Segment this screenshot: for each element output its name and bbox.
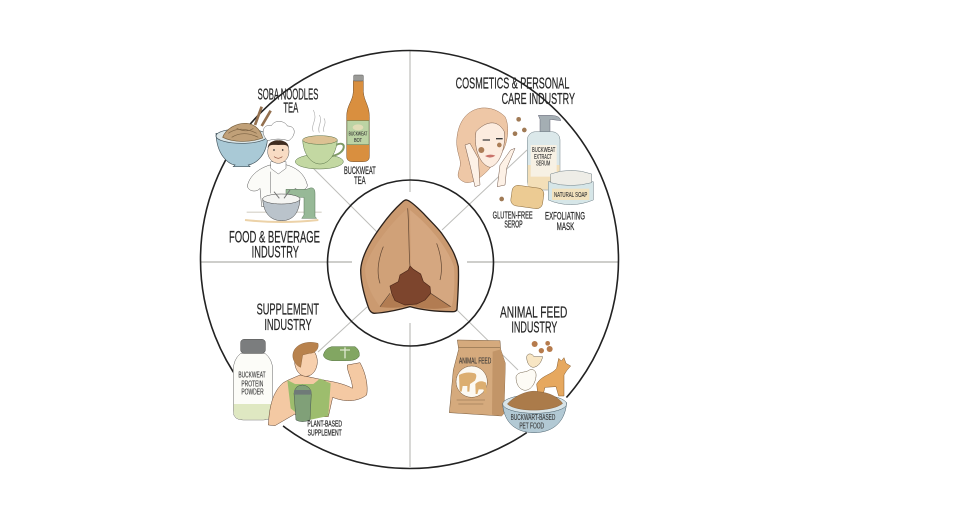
icon: serum bottle: BUCKWEAT xyxy=(532,147,556,154)
label: exfoliating mask: EXFOLIATING xyxy=(545,210,585,222)
icon: serum bottle: SERUM xyxy=(536,161,550,168)
bottle label: BOT xyxy=(354,138,362,144)
panel: food and beverage industry xyxy=(216,75,376,262)
icon: soba noodle bowl xyxy=(216,107,271,167)
icon: natural soap jar xyxy=(548,170,593,205)
icon: animal feed sack: ANIMAL FEED xyxy=(459,356,491,365)
label: exfoliating mask xyxy=(545,210,585,233)
icon: pet food bowl xyxy=(503,391,567,433)
heading: supplement industry: INDUSTRY xyxy=(264,317,312,334)
icon: mixing bowl and mixer xyxy=(245,188,322,222)
icon: chicken xyxy=(516,354,543,390)
icon: pet food bowl: BUCKWART-BASED xyxy=(511,413,555,422)
icon: dog xyxy=(537,358,571,396)
label: plant-based supplement xyxy=(307,419,342,438)
outer ring xyxy=(200,50,618,468)
heading: animal feed industry: INDUSTRY xyxy=(511,319,558,336)
icon: buckwheat grains xyxy=(499,117,527,201)
label: buckwheat tea xyxy=(344,165,376,187)
icon: protein powder jar: POWDER xyxy=(241,387,264,396)
label: buckwheat tea: TEA xyxy=(354,175,366,187)
ring gaps hidden behind illustrations xyxy=(233,373,567,433)
bottle label xyxy=(349,131,368,144)
heading: supplement industry: SUPPLEMENT xyxy=(257,301,319,318)
heading: soba noodles tea xyxy=(258,86,318,116)
label: gluten-free serop: SEROP xyxy=(504,220,523,231)
centre icon: buckwheat seed xyxy=(361,200,459,313)
heading: food and beverage industry xyxy=(229,228,320,262)
icon: protein powder jar xyxy=(233,339,273,420)
bottle label: BUCKWEAT xyxy=(349,131,368,137)
icon: chef xyxy=(247,121,307,207)
heading: animal feed industry xyxy=(500,304,567,336)
label: exfoliating mask: MASK xyxy=(557,221,575,233)
icon: natural soap jar: NATURAL SOAP xyxy=(554,190,587,199)
heading: cosmetics and personal care industry xyxy=(456,76,575,108)
label: gluten-free serop xyxy=(493,210,533,231)
icon: shaker bottles xyxy=(294,347,359,422)
label: gluten-free serop: GLUTEN-FREE xyxy=(493,210,533,221)
icon: muscular man xyxy=(268,342,367,426)
heading: food and beverage industry: FOOD & BEVERAGE xyxy=(229,228,320,247)
icon: soap bar xyxy=(510,185,545,209)
icon: protein powder jar: BUCKWEAT xyxy=(238,371,266,380)
icon: serum bottle xyxy=(527,115,561,190)
panel: supplement industry xyxy=(233,301,367,438)
heading: cosmetics and personal care industry: COSMETICS & PERSONAL xyxy=(456,76,570,93)
panel: cosmetics and personal care industry xyxy=(456,76,593,233)
icon: kibble xyxy=(532,341,553,353)
label: buckwheat tea: BUCKWEAT xyxy=(344,165,376,177)
label: plant-based supplement: PLANT-BASED xyxy=(307,419,342,429)
heading: soba noodles tea: TEA xyxy=(283,100,298,116)
heading: food and beverage industry: INDUSTRY xyxy=(252,243,299,262)
icon: woman applying mask xyxy=(457,108,515,187)
icon: pet food bowl: PET FOOD xyxy=(519,421,544,430)
centre ring xyxy=(328,180,494,346)
icon: cup of tea xyxy=(295,110,344,169)
icon: serum bottle: EXTRACT xyxy=(534,154,552,161)
heading: animal feed industry: ANIMAL FEED xyxy=(500,304,567,321)
heading: soba noodles tea: SOBA NOODLES xyxy=(258,86,318,103)
icon: tea bottle xyxy=(347,75,369,162)
icon: protein powder jar: PROTEIN xyxy=(241,379,263,388)
heading: supplement industry xyxy=(257,301,319,334)
heading: cosmetics and personal care industry: CARE INDUSTRY xyxy=(502,91,575,108)
label: plant-based supplement: SUPPLEMENT xyxy=(308,428,342,438)
panel: animal feed industry xyxy=(449,304,571,433)
